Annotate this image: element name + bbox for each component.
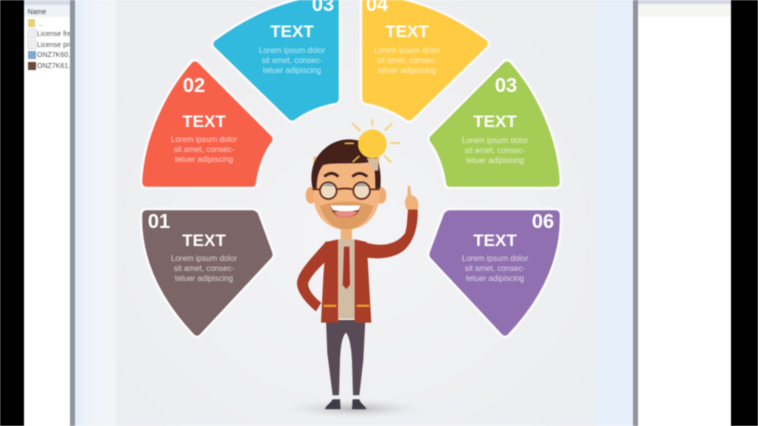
segment 02: red: TEXT (182, 112, 226, 131)
segment 02: red: Lorem ipsum dolor (171, 135, 237, 144)
segment 05: green (428, 60, 561, 188)
segment 06: purple: tetuer adipiscing (466, 274, 524, 283)
shirt (338, 239, 355, 319)
neck (341, 227, 352, 243)
segment 01: brown: 01 (148, 211, 170, 233)
segment 03: blue: TEXT (270, 22, 314, 41)
segment 06: purple: Lorem ipsum dolor (462, 254, 528, 263)
panel: background file list window: License free (37, 31, 75, 38)
segment 01: brown: sit amet, consec- (174, 264, 235, 273)
segment 05: green: TEXT (473, 112, 517, 131)
segment 06: purple: sit amet, consec- (465, 264, 526, 273)
segment 02: red: sit amet, consec- (174, 145, 235, 154)
right arm (360, 209, 418, 258)
segment 04: yellow: tetuer adipiscing (378, 66, 436, 75)
segment 04: yellow (361, 0, 489, 122)
segment 04: yellow: sit amet, consec- (377, 56, 438, 65)
mouth (330, 205, 361, 217)
segment 01: brown: TEXT (182, 231, 226, 250)
panel: right background window (637, 0, 731, 426)
panel: background file list window: Name (28, 9, 46, 16)
segment 06: purple: TEXT (473, 231, 517, 250)
panel: infographic background (116, 0, 595, 426)
glasses (313, 182, 379, 199)
shoes (325, 399, 367, 409)
pupils (323, 184, 367, 187)
panel: main window frame (70, 0, 638, 426)
trousers (326, 320, 365, 395)
segment 01: brown: tetuer adipiscing (175, 274, 233, 283)
character: man with light bulb (280, 119, 430, 419)
light bulb (352, 119, 400, 171)
segment 05: green: tetuer adipiscing (466, 156, 524, 165)
segment 06: purple: 06 (532, 211, 554, 233)
face (313, 157, 379, 230)
segment 02: red (141, 60, 274, 188)
panel: background file list window: ONZ7K60.j (37, 52, 72, 59)
panel: background file list window: .. (39, 21, 43, 28)
hand and pointing finger (405, 186, 419, 209)
segment 04: yellow: Lorem ipsum dolor (374, 46, 440, 55)
panel: background file list window: License pre (37, 42, 73, 49)
jacket (321, 239, 371, 323)
segment 04: yellow: TEXT (385, 22, 429, 41)
segment 03: blue: tetuer adipiscing (263, 66, 321, 75)
eyebrows (324, 173, 367, 177)
segment 05: green: 03 (495, 75, 517, 97)
pocket flaps (324, 305, 369, 307)
segment 01: brown: Lorem ipsum dolor (171, 254, 237, 263)
hair (311, 139, 381, 188)
segment 05: green: sit amet, consec- (465, 146, 526, 155)
segment 05: green: Lorem ipsum dolor (462, 136, 528, 145)
ground shadow (280, 398, 430, 419)
segment 06: purple (428, 209, 561, 337)
beard (320, 202, 373, 229)
hair highlights (345, 143, 359, 162)
segment 03: blue: Lorem ipsum dolor (259, 46, 325, 55)
tie (343, 247, 350, 289)
segment 03: blue (212, 0, 340, 122)
segment 02: red: tetuer adipiscing (175, 155, 233, 164)
ears (306, 187, 386, 204)
segment 03: blue: sit amet, consec- (262, 56, 323, 65)
segment 02: red: 02 (183, 75, 205, 97)
panel: background file list window (24, 0, 75, 426)
left arm (297, 241, 327, 311)
panel: background file list window: ONZ7K61.e (37, 63, 74, 70)
segment 01: brown (141, 209, 274, 337)
